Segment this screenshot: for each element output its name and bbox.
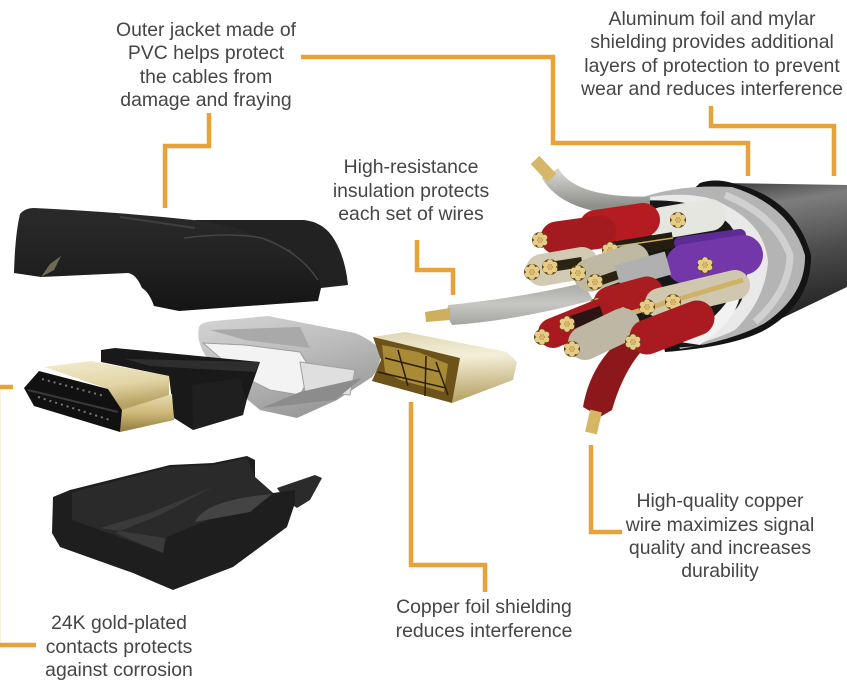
silver braided wire <box>618 263 668 277</box>
grey wire long <box>425 283 593 325</box>
leader line: copper wire <box>591 445 622 532</box>
outer jacket <box>715 183 847 332</box>
text: aluminium foil: Aluminum foil and mylar <box>609 8 816 30</box>
red wire A <box>532 232 600 248</box>
bottom connector shell <box>52 456 322 590</box>
text: aluminium foil: layers of protection to prevent <box>584 55 840 77</box>
text: outer jacket: PVC helps protect <box>128 42 285 64</box>
text: insulation: High-resistance <box>344 156 478 178</box>
braided shield <box>640 186 805 349</box>
text: outer jacket: damage and fraying <box>120 89 292 111</box>
text: outer jacket: the cables from <box>140 66 272 88</box>
grey wire top <box>535 160 650 206</box>
cable <box>425 160 847 433</box>
dark strand wire <box>602 238 673 258</box>
foil band <box>650 195 768 345</box>
clear inner housing <box>198 316 380 418</box>
black rim <box>640 180 811 352</box>
red wire B <box>574 220 643 236</box>
text: copper wire: wire maximizes signal <box>625 514 814 536</box>
text: copper foil: reduces interference <box>396 620 572 642</box>
text: copper wire: durability <box>681 560 759 582</box>
leader line: copper foil <box>411 402 485 592</box>
white wire <box>662 212 710 228</box>
red wire I <box>625 318 697 350</box>
text: gold contacts: against corrosion <box>45 659 193 681</box>
text: copper wire: High-quality copper <box>636 490 804 512</box>
leader line: outer jacket <box>165 113 209 208</box>
beige wire H <box>615 280 743 323</box>
text: insulation: insulation protects <box>333 180 489 202</box>
leader line: foil and mylar outer <box>711 106 834 176</box>
text: outer jacket: Outer jacket made of <box>116 19 297 41</box>
text: gold contacts: 24K gold-plated <box>51 612 187 634</box>
HDMI plug <box>24 348 260 432</box>
white foil strip <box>680 296 740 345</box>
purple wire <box>686 255 743 273</box>
text: copper foil: Copper foil shielding <box>396 596 572 618</box>
beige wire F <box>570 260 633 290</box>
text: copper wire: quality and increases <box>629 537 811 559</box>
text: insulation: each set of wires <box>338 203 484 225</box>
beige wire K <box>564 325 623 357</box>
red wire G <box>589 293 647 314</box>
leader line: gold contacts <box>0 387 36 645</box>
cavity <box>600 200 747 350</box>
leader line: insulation <box>417 240 453 295</box>
text: gold contacts: contacts protects <box>46 636 192 658</box>
red bottom wire <box>583 337 640 433</box>
purple back wire <box>680 235 740 243</box>
leader line: foil and mylar inner <box>301 57 748 176</box>
red wire J <box>534 312 602 345</box>
text: aluminium foil: wear and reduces interference <box>580 78 843 100</box>
top connector shell <box>14 208 348 311</box>
copper foil gold shell <box>372 332 517 403</box>
text: aluminium foil: shielding provides additional <box>590 31 834 53</box>
beige wire E <box>524 259 582 280</box>
